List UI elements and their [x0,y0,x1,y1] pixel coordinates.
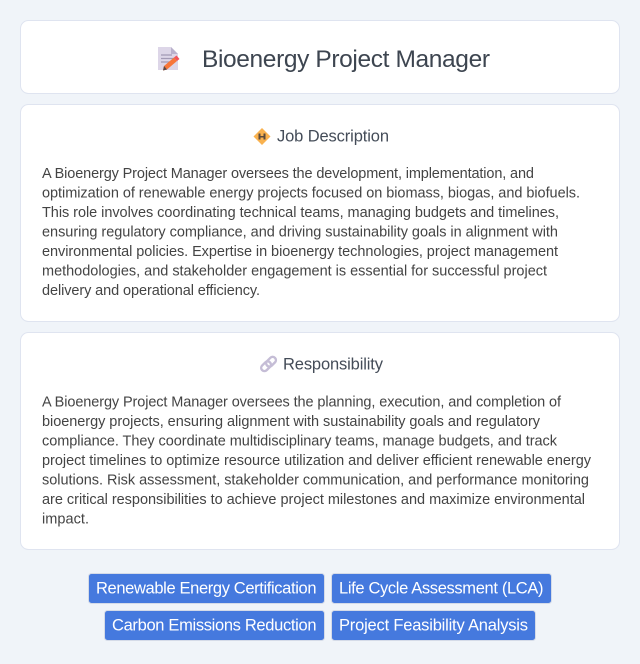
tag: renewable energy certification [88,574,324,604]
text block: responsibility body: are critical responsibilities to achieve project milestones and maximize environmental [42,492,585,508]
text block: responsibility body: project timelines to optimize resource utilization and deliver efficient renewable energy [42,453,592,469]
panel: title header [20,20,620,94]
tag: life cycle assessment [332,574,552,604]
icon: document with pencil [158,47,180,70]
tag: renewable energy certification: Renewable Energy Certification [96,580,316,598]
tag: project feasibility analysis [332,610,536,640]
heading: responsibility: Responsibility [283,356,384,374]
text block: responsibility body: A Bioenergy Project Manager oversees the planning, execution, and completion of [42,394,562,410]
icon: orange diamond [254,128,270,145]
icon: chain link [260,356,277,372]
heading: job description: Job Description [277,128,389,146]
title: Bioenergy Project Manager [202,46,490,73]
tag: carbon emissions reduction: Carbon Emissions Reduction [112,616,316,634]
panel: job description [20,104,620,322]
text block: responsibility body: compliance. They coordinate multidisciplinary teams, manage budgets, and track [42,434,558,450]
skill tags [88,574,552,640]
text block: job description body [42,166,580,299]
text block: job description body: ensuring regulatory compliance, and driving sustainability goals in alignment with [42,224,558,240]
text block: responsibility body: bioenergy projects, ensuring alignment with sustainability goals and regulatory [42,414,541,430]
text block: job description body: delivery and operational efficiency. [42,283,260,299]
text block: job description body: optimization of renewable energy projects focused on biomass, biogas, and biofuels. [42,186,580,202]
tag: life cycle assessment: Life Cycle Assessment (LCA) [339,580,544,598]
text block: responsibility body [42,394,592,528]
panel: responsibility [20,332,620,550]
text block: job description body: environmental policies. Expertise in bioenergy technologies, project management [42,244,558,260]
text block: responsibility body: impact. [42,512,89,528]
tag: carbon emissions reduction [104,610,324,640]
tag: project feasibility analysis: Project Feasibility Analysis [339,616,528,634]
text block: job description body: This role involves coordinating technical teams, managing budgets and timelines, [42,205,559,221]
text block: job description body: methodologies, and stakeholder engagement is essential for successful project [42,264,547,280]
text block: job description body: A Bioenergy Project Manager oversees the development, implementation, and [42,166,534,182]
text block: responsibility body: solutions. Risk assessment, stakeholder communication, and performance monitoring [42,472,589,488]
